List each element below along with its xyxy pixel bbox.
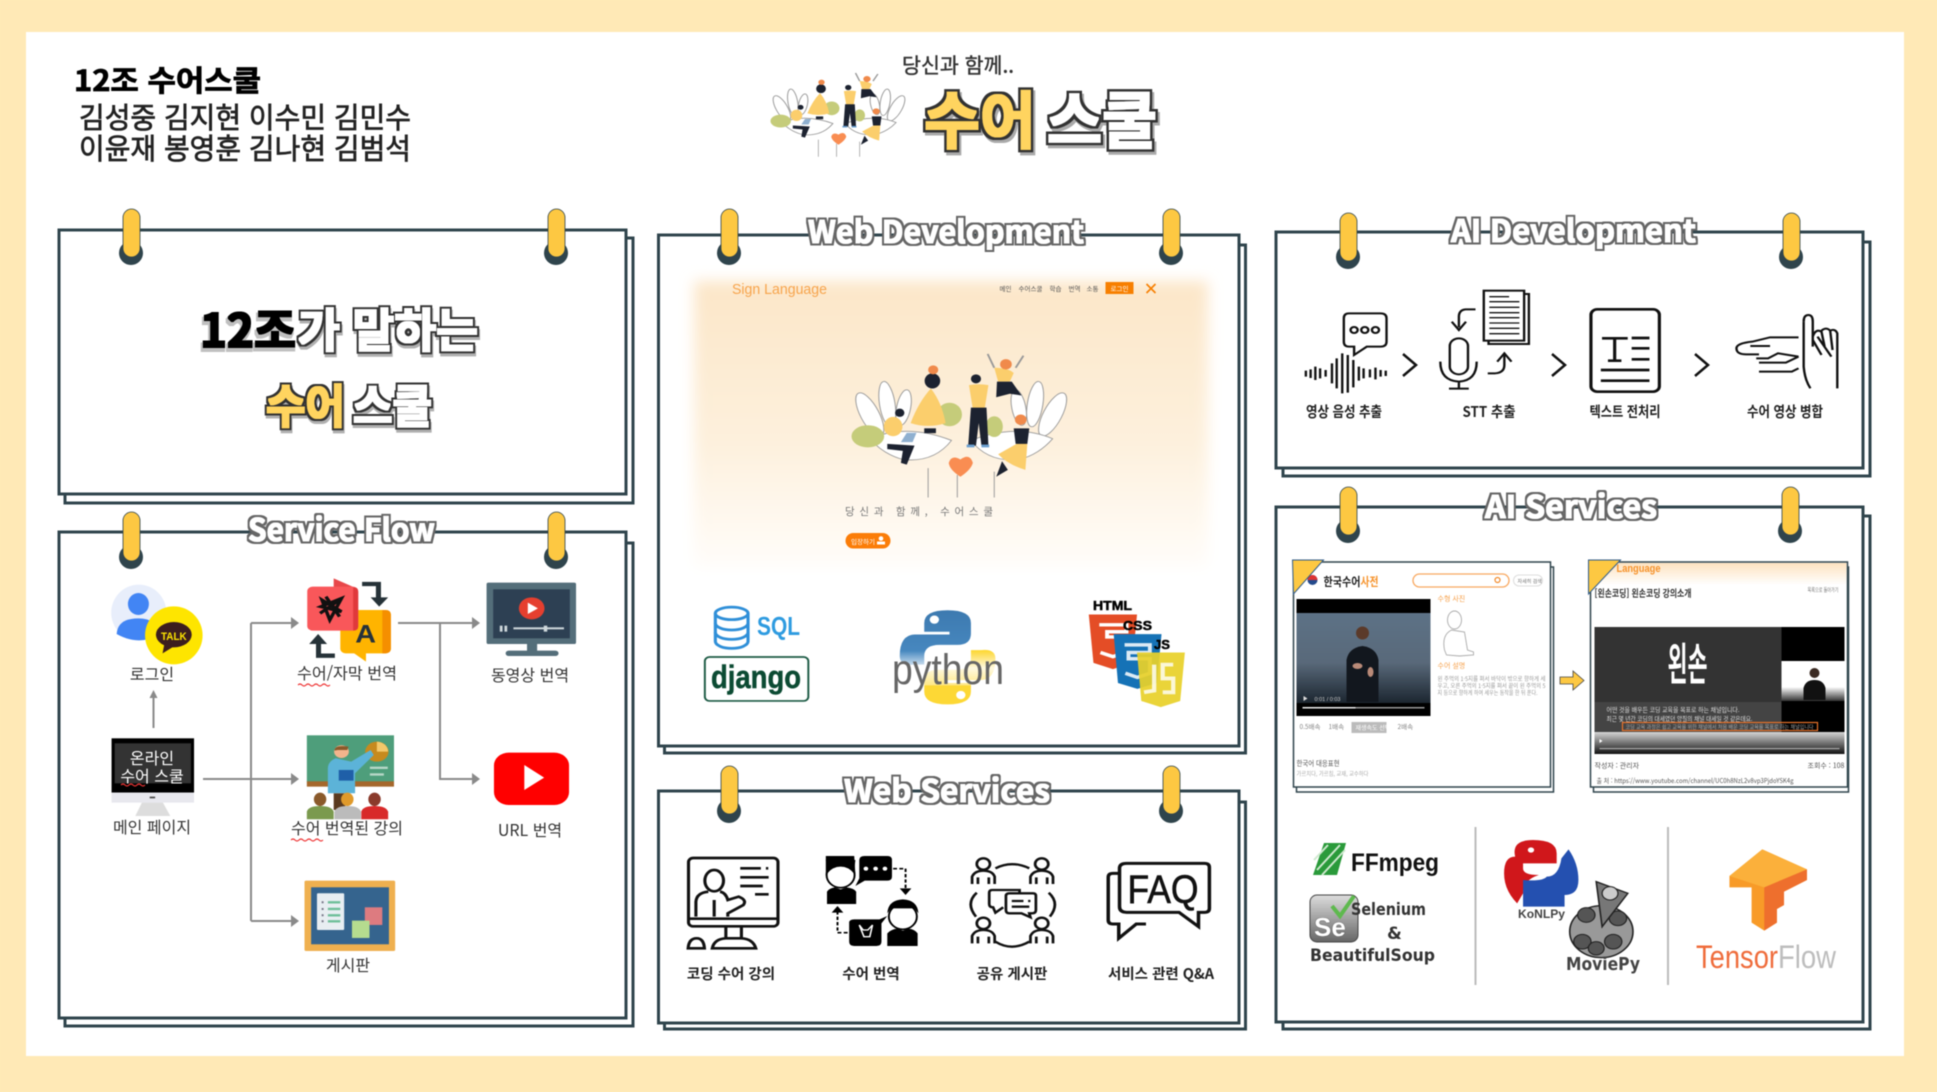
ring: left (119, 209, 143, 265)
label: 로그인 (130, 661, 174, 685)
label: 영상 음성 추출 (1306, 401, 1382, 422)
icon: speech extraction (1306, 313, 1387, 393)
label: 수어 번역 (842, 963, 900, 984)
speed tabs (1300, 721, 1413, 733)
card: coding lecture screenshot (1588, 560, 1848, 792)
site name: Language (1616, 563, 1660, 575)
icon: main page monitor: 온라인 (130, 745, 174, 769)
heading: AI Development (1450, 206, 1696, 251)
panel: service flow (59, 505, 633, 1026)
website screenshot (694, 281, 1208, 568)
ring: left (717, 209, 741, 265)
slogan text: 수어 (266, 371, 345, 437)
heading: AI Services (1484, 482, 1657, 527)
slogan text: 스쿨 (353, 371, 432, 437)
icon: text preprocessing (1591, 309, 1659, 392)
speed tabs: 1배속 (1328, 721, 1344, 731)
lecture meta (1594, 761, 1844, 785)
team heading: 이윤재 봉영훈 김나현 김범석 (79, 126, 411, 168)
lecture title: [왼손코딩] 왼손코딩 강의소개 (1594, 585, 1692, 600)
panel: slogan (59, 209, 633, 503)
site nav: 로그인 (1111, 283, 1128, 293)
site button: 입장하기 (851, 536, 875, 546)
logo wordmark: 스쿨 (1047, 71, 1157, 161)
logo: TensorFlow: Tensor (1696, 939, 1778, 975)
related words: 한국어 대응표현 (1296, 758, 1340, 769)
logo: SQL and django: SQL (757, 611, 800, 641)
ring: left (717, 766, 741, 823)
panel: AI services (1276, 482, 1870, 1029)
icon: youtube (494, 753, 569, 805)
dictionary logo: 한국수어 (1324, 573, 1360, 590)
logo: MoviePy: MoviePy (1566, 954, 1640, 975)
dividers (1474, 827, 1669, 985)
icon: sign translation (826, 856, 918, 946)
label: URL 번역 (498, 817, 562, 841)
logo wordmark: 수어 (924, 71, 1036, 161)
label: 동영상 번역 (491, 662, 569, 686)
speed tabs: 0.5배속 (1300, 721, 1321, 731)
logo: HTML CSS JS: HTML (1093, 598, 1132, 613)
label: 수어 영상 병합 (1747, 401, 1823, 422)
logo: python (891, 610, 1004, 704)
ring: right (1779, 213, 1803, 269)
flow arrows (150, 617, 480, 927)
logo illustration: people on hands (770, 73, 908, 157)
icon: translate: A (355, 620, 376, 648)
icon: sign language merge (1736, 315, 1837, 388)
logo: KoNLPy (1504, 840, 1578, 921)
logo: Selenium and BeautifulSoup: BeautifulSoup (1310, 946, 1435, 966)
site nav: 번역 (1068, 283, 1080, 293)
speed tabs: 재생속도 선택 (1356, 723, 1390, 732)
logo: python: python (892, 646, 1004, 694)
lecture video: 최근 몇 년간 코딩의 대세였던 양질의 채널 대세일 것 같은데요. (1606, 713, 1753, 723)
related words: 가르치다, 가르침, 교재, 교수하다 (1296, 769, 1369, 778)
arrow chevron (1552, 354, 1565, 376)
icon: translate (307, 578, 391, 662)
site nav: 학습 (1050, 283, 1061, 293)
label: 메인 페이지 (113, 814, 191, 838)
ring: right (1159, 766, 1183, 823)
site nav (1000, 282, 1156, 294)
ring: left (1336, 487, 1360, 543)
site nav: 메인 (1000, 283, 1011, 293)
ring: right (544, 209, 568, 265)
icon: login: TALK (161, 630, 187, 643)
panel: web development (658, 207, 1246, 753)
icon: main page monitor (112, 738, 194, 816)
panel: web services (658, 766, 1246, 1029)
ring: left (119, 512, 143, 569)
logo: Selenium and BeautifulSoup (1310, 895, 1435, 966)
logo: SQL and django: django (711, 659, 801, 695)
lecture meta: 출 처 : https://www.youtube.com/channel/UC0h8NzL2v8vp3PjdoYSK4g (1596, 775, 1794, 785)
arrow chevron (1403, 354, 1416, 376)
ring: right (1778, 487, 1802, 543)
lecture video: 어떤 것을 배우든 코딩 교육을 목표로 하는 채널입니다. (1606, 704, 1740, 714)
label: 공유 게시판 (977, 963, 1047, 984)
logo: HTML CSS JS: CSS (1123, 618, 1152, 633)
logo: Selenium and BeautifulSoup: & (1387, 924, 1402, 944)
sign description: 수형 사진 (1438, 594, 1465, 604)
slogan text (200, 295, 478, 437)
sign description: 우고, 오른 주먹의 1·5지를 펴서 끝이 왼 주먹의 5 (1438, 681, 1546, 690)
logo: FFmpeg (1313, 843, 1439, 877)
sign description: 수어 설명 (1438, 661, 1465, 671)
site logo: Sign Language (732, 281, 827, 298)
icon: FAQ (1108, 863, 1209, 938)
label: 텍스트 전처리 (1590, 401, 1660, 422)
logo: KoNLPy: KoNLPy (1518, 907, 1565, 921)
dictionary logo: 사전 (1360, 573, 1378, 590)
team heading: 김성중 김지현 이수민 김민수 (79, 95, 411, 137)
icon: FAQ: FAQ (1128, 868, 1198, 912)
site tagline: 당신과 함께, 수어스쿨 (845, 504, 993, 519)
sign description: 지 등으로 향하게 하여 세우는 동작을 한 뒤 푼다. (1438, 688, 1538, 697)
sign video: 0:01 / 0:03 (1314, 697, 1340, 703)
logo: HTML CSS JS: JS (1154, 637, 1170, 652)
search pill: 자세히 검색 (1518, 578, 1542, 585)
lecture meta: 조회수 : 108 (1808, 761, 1844, 771)
label: 서비스 관련 Q&A (1108, 963, 1215, 984)
speed tabs: 2배속 (1398, 721, 1413, 731)
icon: classroom (307, 735, 394, 819)
icon: main page monitor: 수어 스쿨 (120, 763, 184, 787)
dictionary logo (1308, 573, 1378, 590)
search pill (1413, 574, 1542, 587)
site illustration (850, 354, 1072, 498)
icon: shared board (971, 858, 1055, 947)
label: 수어/자막 번역 (297, 660, 397, 684)
lecture video: 코딩 교육 과정은 쉽고 교육을 위한 채널에서 처음 배운 코딩 교육을 목표로 하는 채널입니다 (1626, 723, 1814, 731)
lecture video: 왼손 (1668, 629, 1708, 693)
lecture meta: 작성자 : 관리자 (1594, 761, 1640, 771)
label: 수어 번역된 강의 (291, 815, 403, 839)
label: 코딩 수어 강의 (687, 963, 775, 984)
ring: right (544, 512, 568, 569)
logo wordmark (924, 71, 1157, 161)
corner fold (1292, 560, 1324, 594)
corner fold (1588, 560, 1620, 594)
logo: Selenium and BeautifulSoup: Selenium (1351, 900, 1426, 920)
logo: MoviePy (1566, 882, 1640, 975)
tagline: 당신과 함께.. (902, 50, 1014, 80)
logo: SQL and django (705, 607, 808, 701)
icon: speech to text (1440, 291, 1529, 389)
icon: coding lecture (688, 858, 778, 948)
logo: TensorFlow (1696, 849, 1837, 975)
panel: AI development (1276, 206, 1870, 476)
slogan text: 12조 (200, 295, 296, 361)
icon: login (111, 585, 203, 664)
label: 게시판 (326, 952, 370, 976)
ring: right (1159, 209, 1183, 265)
related words (1296, 758, 1369, 778)
heading: Service Flow (248, 505, 435, 550)
sign video (1296, 599, 1430, 716)
site nav: 수어스쿨 (1018, 283, 1042, 293)
lecture title: 목록으로 돌아가기 (1808, 586, 1838, 594)
heading: Web Development (808, 207, 1084, 252)
ring: left (1336, 213, 1360, 269)
sign description (1438, 594, 1546, 697)
icon: video (487, 583, 576, 656)
site button (846, 533, 890, 548)
icon: notice board (305, 881, 395, 951)
site nav: 소통 (1086, 283, 1098, 293)
slogan text: 가 말하는 (298, 295, 478, 361)
logo: Selenium and BeautifulSoup: Se (1314, 912, 1346, 942)
card: sign dictionary screenshot (1292, 560, 1554, 792)
heading: Web Services (844, 766, 1050, 811)
team heading (74, 58, 411, 168)
lecture title (1594, 585, 1838, 600)
lecture video (1594, 627, 1844, 754)
logo: FFmpeg: FFmpeg (1351, 849, 1439, 877)
logo: HTML CSS JS (1089, 598, 1185, 707)
team heading: 12조 수어스쿨 (74, 58, 261, 100)
logo: TensorFlow: Flow (1778, 939, 1837, 975)
sign description: 왼 주먹의 1·5지를 펴서 바닥이 밖으로 향하게 세 (1438, 674, 1546, 683)
arrow: dictionary to lecture (1560, 671, 1584, 690)
arrow chevron (1695, 354, 1708, 376)
label: STT 추출 (1462, 401, 1516, 422)
